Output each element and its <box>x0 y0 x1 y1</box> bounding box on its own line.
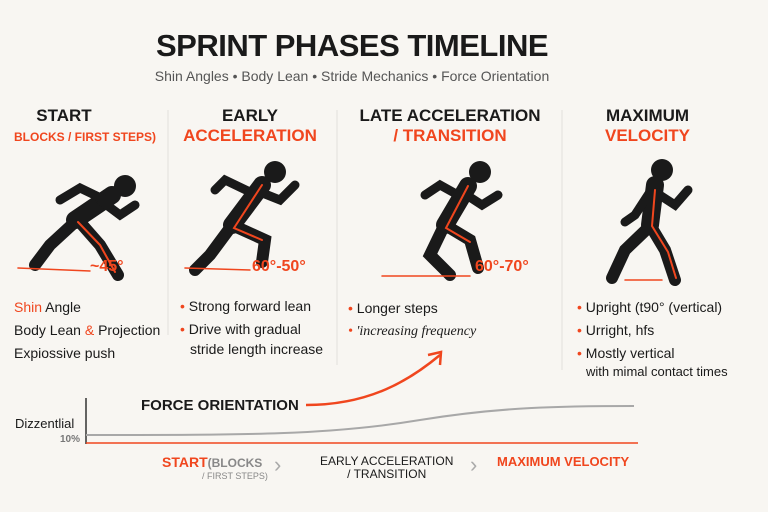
text: › <box>470 452 477 477</box>
chart: force orientation <box>85 350 638 444</box>
text: early: stride length increase <box>190 341 323 357</box>
text: max: Upright (t90° (vertical) <box>586 299 722 315</box>
text: MAXIMUM VELOCITY <box>497 454 629 469</box>
text: start: Shin Angle <box>14 299 81 315</box>
text: 60°-50° <box>252 258 306 275</box>
text: late <box>348 300 476 339</box>
text: › <box>274 452 281 477</box>
heading: late acceleration: / TRANSITION <box>393 126 507 145</box>
runners <box>17 159 692 286</box>
heading: early acceleration: EARLY <box>222 106 278 125</box>
text: / TRANSITION <box>347 467 426 481</box>
text: max: with mimal contact times <box>586 364 728 379</box>
runner 2 <box>185 161 295 270</box>
title: SPRINT PHASES TIMELINE <box>156 28 548 63</box>
text: max: Urright, hfs <box>586 322 654 338</box>
heading: maximum velocity: MAXIMUM <box>606 106 689 125</box>
text: early <box>180 298 323 357</box>
heading: late acceleration: LATE ACCELERATION <box>359 106 540 125</box>
heading: early acceleration: ACCELERATION <box>183 126 317 145</box>
timeline labels: START(BLOCKS <box>162 454 262 470</box>
subtitle: Shin Angles • Body Lean • Stride Mechanics • Force Orientation <box>155 68 549 84</box>
runner 1 <box>18 175 136 275</box>
text: early: Strong forward lean <box>189 298 311 314</box>
text: 10% <box>60 434 80 445</box>
chart label: FORCE ORIENTATION <box>141 397 299 414</box>
text: EARLY ACCELERATION <box>320 454 453 468</box>
text: 60°-70° <box>475 258 529 275</box>
runner 4 <box>612 159 688 280</box>
axis labels: Dizzentlial <box>15 416 74 431</box>
heading: maximum velocity: VELOCITY <box>605 126 690 145</box>
heading: maximum velocity <box>605 106 690 145</box>
text: start: Body Lean & Projection <box>14 322 160 338</box>
text: start: Expiossive push <box>14 345 115 361</box>
heading: late acceleration <box>359 106 540 145</box>
runner 3 <box>382 161 498 276</box>
text: / FIRST STEPS) <box>202 471 268 481</box>
heading: early acceleration <box>183 106 317 145</box>
angle labels: ~45° <box>90 258 124 275</box>
heading: start: START <box>36 106 92 125</box>
text: max <box>578 299 728 379</box>
text: start <box>14 299 160 361</box>
heading: start sub: BLOCKS / FIRST STEPS) <box>14 130 156 144</box>
text: late: Longer steps <box>357 300 438 316</box>
text: early: Drive with gradual <box>189 321 301 337</box>
text: late: 'increasing frequency <box>356 324 476 339</box>
text: max: Mostly vertical <box>586 345 674 361</box>
